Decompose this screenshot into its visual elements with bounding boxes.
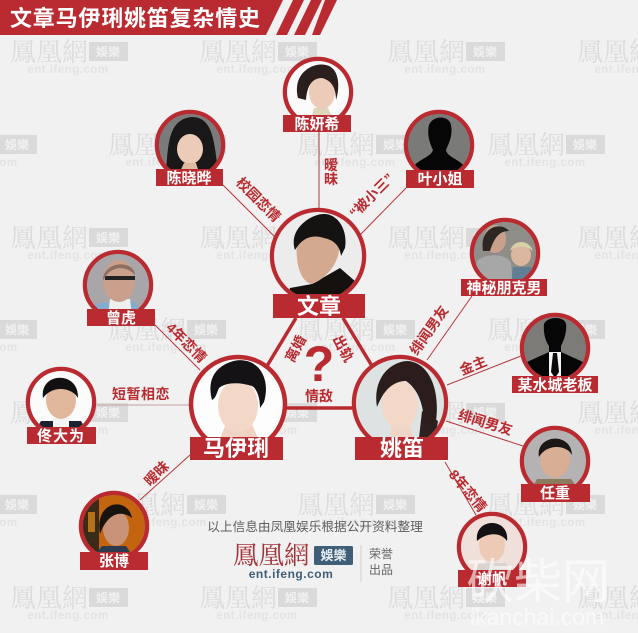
watermark pattern: ent.ifeng.com bbox=[504, 342, 586, 354]
watermark pattern: 娛樂 bbox=[194, 322, 218, 337]
label: 离婚: 离婚 bbox=[282, 333, 309, 365]
watermark pattern: ent.ifeng.com bbox=[216, 425, 298, 437]
relation: 绯闻男友 神秘朋克男 bbox=[406, 296, 472, 360]
watermark pattern: 娛樂 bbox=[96, 590, 120, 605]
watermark pattern: ent.ifeng.com bbox=[27, 250, 109, 262]
portrait: 马伊琍 bbox=[210, 360, 266, 437]
watermark pattern: 鳳凰網 bbox=[199, 38, 277, 67]
portrait: 佟大为 bbox=[30, 371, 92, 427]
watermark pattern: ent.ifeng.com bbox=[314, 517, 396, 529]
watermark pattern: 鳳凰網 bbox=[387, 224, 465, 253]
relation: 暧昧 张博 bbox=[140, 455, 190, 500]
name label bbox=[87, 309, 155, 326]
relation: 金主: 金主 bbox=[457, 353, 489, 378]
node: 陈晓晔 bbox=[156, 112, 223, 187]
watermark pattern: 鳳凰網 bbox=[297, 491, 375, 520]
watermark pattern: 娛樂 bbox=[285, 44, 309, 59]
watermark pattern: 娛樂 bbox=[285, 590, 309, 605]
watermark pattern: 娛樂 bbox=[573, 497, 597, 512]
watermark pattern: 鳳凰網 bbox=[10, 399, 88, 428]
logo url: ent.ifeng.com bbox=[249, 567, 333, 581]
portrait: 陈晓晔 bbox=[159, 114, 221, 169]
portrait: silhouette 某水城老板 bbox=[524, 317, 586, 380]
watermark pattern: ent.ifeng.com bbox=[314, 342, 396, 354]
overlay watermark: ikanchai.com bbox=[470, 604, 604, 630]
relation: 暧昧 陈妍希: 暧 bbox=[324, 157, 338, 173]
name label bbox=[80, 552, 148, 570]
watermark pattern: ent.ifeng.com bbox=[27, 64, 109, 76]
watermark pattern: ent.ifeng.com bbox=[404, 610, 486, 622]
watermark pattern: 鳳凰網 bbox=[387, 399, 465, 428]
name label bbox=[27, 427, 96, 444]
portrait: silhouette 叶小姐 bbox=[408, 114, 470, 170]
relation: 短暂相恋 bbox=[97, 386, 190, 405]
node: 陈妍希 bbox=[283, 59, 351, 133]
title: 文章马伊琍姚笛复杂情史 bbox=[10, 6, 261, 31]
node: 叶小姐: 叶小姐 bbox=[417, 171, 463, 188]
watermark pattern: 鳳凰網 bbox=[297, 316, 375, 345]
name label bbox=[156, 169, 223, 186]
watermark pattern: 娛樂 bbox=[383, 497, 407, 512]
label: 情敌: 情敌 bbox=[305, 388, 333, 404]
name label bbox=[406, 170, 474, 188]
watermark pattern: 鳳凰網 bbox=[108, 131, 186, 160]
node: 神秘朋克男: 神秘朋克男 bbox=[466, 279, 542, 297]
name label bbox=[458, 570, 526, 587]
node: 曾虎: 曾虎 bbox=[106, 309, 136, 327]
watermark pattern: 娛樂 bbox=[573, 322, 597, 337]
label: 出轨: 出轨 bbox=[330, 333, 357, 365]
watermark pattern: 鳳凰網 bbox=[487, 491, 565, 520]
node: 曾虎 bbox=[85, 252, 155, 327]
watermark pattern: ent.ifeng.com bbox=[504, 157, 586, 169]
portrait: 文章 bbox=[274, 212, 362, 300]
watermark pattern: 娛樂 bbox=[473, 230, 497, 245]
watermark pattern: 鳳凰網 bbox=[199, 224, 277, 253]
watermark pattern: 娛樂 bbox=[285, 405, 309, 420]
node: 张博: 张博 bbox=[99, 552, 129, 570]
watermark pattern: 娛樂 bbox=[5, 137, 29, 152]
watermark pattern: ent.ifeng.com bbox=[27, 425, 109, 437]
watermark pattern: 鳳凰網 bbox=[387, 584, 465, 613]
relation: 被小三 bbox=[346, 170, 406, 235]
relation: 4年恋情: 4年恋情 bbox=[163, 319, 210, 366]
name label bbox=[355, 437, 448, 460]
watermark pattern: 鳳凰網 bbox=[199, 584, 277, 613]
name label bbox=[521, 484, 590, 502]
watermark pattern: ent.ifeng.com bbox=[125, 342, 207, 354]
relation: 金主 bbox=[447, 353, 521, 385]
watermark pattern: ent.ifeng.com bbox=[314, 157, 396, 169]
node: 谢帆 bbox=[458, 514, 526, 588]
credit: 荣誉出品: 出品 bbox=[369, 563, 393, 577]
node: 谢帆: 谢帆 bbox=[477, 570, 507, 588]
watermark pattern: 鳳凰網 bbox=[108, 491, 186, 520]
watermark pattern: ent.ifeng.com bbox=[216, 64, 298, 76]
watermark pattern: ent.ifeng.com bbox=[504, 517, 586, 529]
source note: 以上信息由凤凰娱乐根据公开资料整理 bbox=[207, 519, 423, 534]
watermark pattern: ent.ifeng.com bbox=[216, 610, 298, 622]
node: 某水城老板: 某水城老板 bbox=[517, 376, 593, 394]
watermark pattern: 娛樂 bbox=[473, 44, 497, 59]
name label bbox=[190, 437, 283, 460]
node: 佟大为 bbox=[27, 369, 96, 445]
node: 马伊琍 bbox=[190, 357, 285, 461]
portrait: 任重 bbox=[524, 430, 586, 484]
watermark pattern: 娛樂 bbox=[5, 322, 29, 337]
logo: 鳳凰網: 鳳凰網 bbox=[233, 541, 310, 570]
watermark pattern: 鳳凰網 bbox=[10, 38, 88, 67]
watermark pattern: 娛樂 bbox=[383, 137, 407, 152]
overlay watermark: 砍柴网 bbox=[466, 556, 610, 609]
logo badge: 娛樂: 娛樂 bbox=[320, 548, 347, 563]
watermark pattern: 鳳凰網 bbox=[108, 316, 186, 345]
watermark pattern: ent.ifeng.com bbox=[125, 157, 207, 169]
watermark pattern: 娛樂 bbox=[96, 230, 120, 245]
watermark pattern: 娛樂 bbox=[383, 322, 407, 337]
watermark pattern: 鳳凰網 bbox=[487, 131, 565, 160]
name label bbox=[273, 294, 365, 318]
logo badge: 娛樂 bbox=[314, 546, 353, 565]
portrait: 曾虎 bbox=[87, 254, 149, 309]
watermark pattern: ent.ifeng.com bbox=[404, 250, 486, 262]
triangle: 文章 马伊琍 姚笛 bbox=[267, 318, 372, 408]
credit: 荣誉出品 bbox=[369, 547, 393, 577]
watermark pattern: 娛樂 bbox=[573, 137, 597, 152]
node: 某水城老板 bbox=[512, 315, 598, 394]
watermark pattern: 娛樂 bbox=[96, 405, 120, 420]
relation: 暧昧 陈妍希 bbox=[319, 132, 338, 208]
node: 文章: 文章 bbox=[297, 294, 341, 319]
watermark pattern: ent.ifeng.com bbox=[404, 425, 486, 437]
node: 文章 bbox=[272, 210, 365, 319]
name label bbox=[461, 279, 547, 296]
watermark pattern: 鳳凰網 bbox=[487, 316, 565, 345]
node: 陈妍希: 陈妍希 bbox=[294, 115, 340, 133]
watermark pattern: 娛樂 bbox=[194, 497, 218, 512]
portrait: 姚笛 bbox=[356, 359, 444, 437]
watermark pattern: 娛樂 bbox=[96, 44, 120, 59]
relation: 被小三: “被小三” bbox=[346, 170, 397, 221]
watermark pattern: 鳳凰網 bbox=[387, 38, 465, 67]
relation: 暧昧 张博: 暧昧 bbox=[141, 458, 172, 489]
portrait: 谢帆 bbox=[461, 516, 523, 570]
watermark pattern: 娛樂 bbox=[285, 230, 309, 245]
relation: 绯闻男友 任重 bbox=[446, 406, 523, 446]
relation: 8年恋情: 8年恋情 bbox=[446, 467, 490, 515]
watermark pattern: ent.ifeng.com bbox=[404, 64, 486, 76]
relation: 校园恋情: 校园恋情 bbox=[233, 174, 284, 225]
node: 陈晓晔: 陈晓晔 bbox=[166, 169, 212, 187]
node: 姚笛 bbox=[354, 357, 448, 461]
credit: 荣誉出品: 荣誉 bbox=[369, 547, 393, 561]
title banner bbox=[0, 0, 337, 35]
relation: 校园恋情 bbox=[223, 174, 284, 238]
watermark pattern: 鳳凰網 bbox=[199, 399, 277, 428]
watermark pattern: 鳳凰網 bbox=[10, 584, 88, 613]
watermark pattern: 娛樂 bbox=[473, 590, 497, 605]
watermark pattern: ent.ifeng.com bbox=[216, 250, 298, 262]
watermark pattern: 娛樂 bbox=[5, 497, 29, 512]
watermark pattern: ent.ifeng.com bbox=[27, 610, 109, 622]
relation: 绯闻男友 神秘朋克男: 绯闻男友 bbox=[406, 303, 452, 358]
portrait: 神秘朋克男 bbox=[474, 222, 536, 285]
node: 马伊琍: 马伊琍 bbox=[203, 436, 269, 461]
relation: 绯闻男友 任重: 绯闻男友 bbox=[456, 406, 515, 438]
watermark pattern: ent.ifeng.com bbox=[125, 517, 207, 529]
name label bbox=[512, 376, 598, 393]
watermark pattern: 娛樂 bbox=[473, 405, 497, 420]
node: 姚笛: 姚笛 bbox=[380, 436, 424, 461]
node: 叶小姐 bbox=[406, 112, 474, 188]
watermark pattern: 鳳凰網 bbox=[10, 224, 88, 253]
watermark pattern: 娛樂 bbox=[194, 137, 218, 152]
portrait: 张博 bbox=[83, 495, 145, 558]
question mark: ? bbox=[304, 336, 334, 392]
relation: 暧昧 陈妍希: 昧 bbox=[324, 171, 338, 187]
node: 张博 bbox=[80, 493, 148, 570]
node: 佟大为: 佟大为 bbox=[37, 427, 85, 445]
watermark pattern: 鳳凰網 bbox=[297, 131, 375, 160]
footer credits bbox=[207, 519, 423, 582]
portrait: 陈妍希 bbox=[287, 61, 349, 115]
relation: 短暂相恋: 短暂相恋 bbox=[112, 386, 170, 402]
node: 神秘朋克男 bbox=[461, 220, 547, 297]
node: 任重: 任重 bbox=[540, 484, 570, 502]
name label bbox=[283, 115, 351, 132]
node: 任重 bbox=[521, 428, 590, 502]
